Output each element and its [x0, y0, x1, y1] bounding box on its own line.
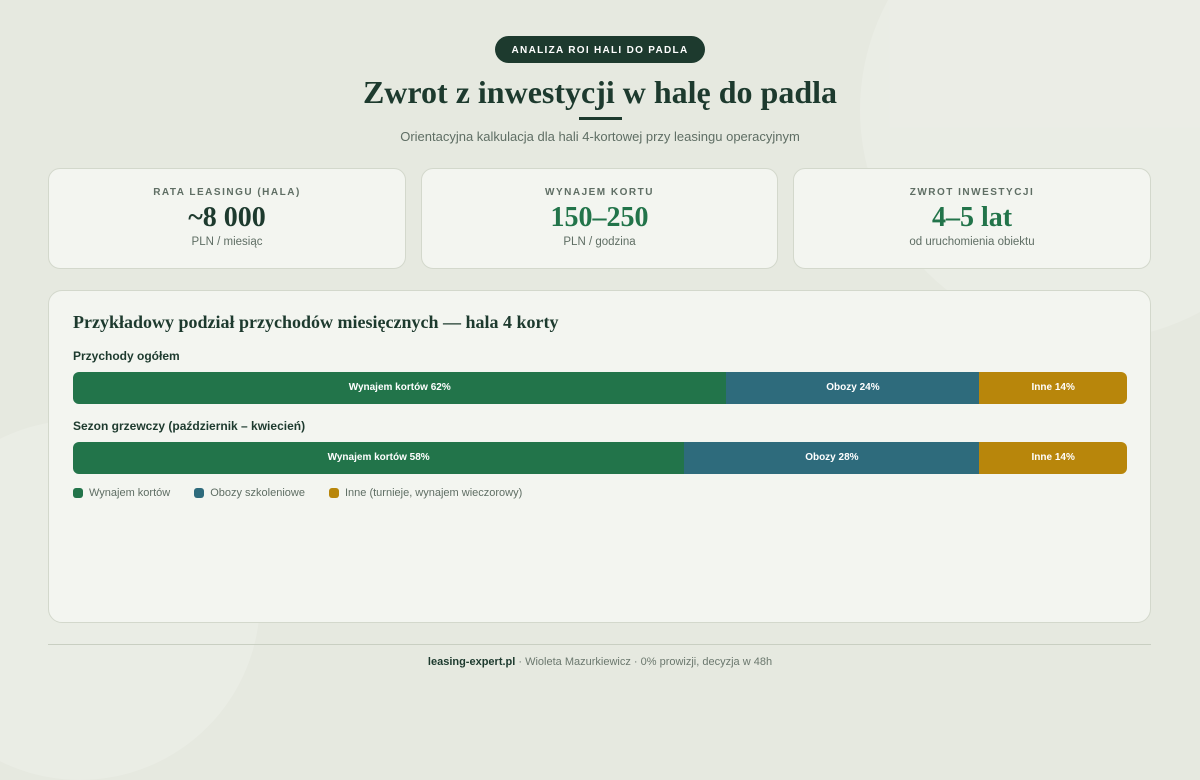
- card: wynajem: WYNAJEM KORTU: [545, 187, 654, 198]
- bar chart: total: [73, 372, 1127, 404]
- bar chart: season: Inne 14%: [1032, 452, 1075, 463]
- card: zwrot: 4–5 lat: [932, 202, 1012, 233]
- card: wynajem: PLN / godzina: [563, 236, 636, 248]
- bar chart: season: [73, 442, 1127, 474]
- footer: leasing-expert.pl · Wioleta Mazurkiewicz · 0% prowizji, decyzja w 48h: [428, 656, 772, 668]
- card: rata: RATA LEASINGU (HALA): [153, 187, 301, 198]
- legend: Wynajem kortów: [89, 487, 170, 499]
- legend: Inne (turnieje, wynajem wieczorowy): [345, 487, 522, 499]
- card: rata: [48, 168, 406, 269]
- title: Zwrot z inwestycji w halę do padla: [363, 74, 837, 110]
- bar chart: season: Obozy 28%: [805, 452, 859, 463]
- card: rata: PLN / miesiąc: [192, 236, 262, 248]
- bar chart: season: Wynajem kortów 58%: [328, 452, 430, 463]
- bar chart: total: Inne 14%: [1032, 382, 1075, 393]
- panel heading: Przykładowy podział przychodów miesięcznych — hala 4 korty: [73, 312, 558, 332]
- bar chart: total: Obozy 24%: [826, 382, 880, 393]
- card: zwrot: od uruchomienia obiektu: [909, 236, 1035, 248]
- card: rata: ~8 000: [188, 202, 266, 233]
- badge: [495, 36, 705, 63]
- card: zwrot: ZWROT INWESTYCJI: [910, 187, 1034, 198]
- legend: Obozy szkoleniowe: [210, 487, 305, 499]
- card: wynajem: [421, 168, 778, 269]
- label: total: Przychody ogółem: [73, 349, 180, 363]
- label: season: Sezon grzewczy (październik – kwiecień): [73, 419, 305, 433]
- panel: revenue split: [48, 290, 1151, 623]
- card: wynajem: 150–250: [550, 202, 648, 233]
- card: zwrot: [793, 168, 1151, 269]
- bar chart: total: Wynajem kortów 62%: [349, 382, 451, 393]
- subtitle: Orientacyjna kalkulacja dla hali 4-kortowej przy leasingu operacyjnym: [400, 129, 800, 144]
- legend: [73, 487, 522, 499]
- badge: ANALIZA ROI HALI DO PADLA: [512, 45, 688, 56]
